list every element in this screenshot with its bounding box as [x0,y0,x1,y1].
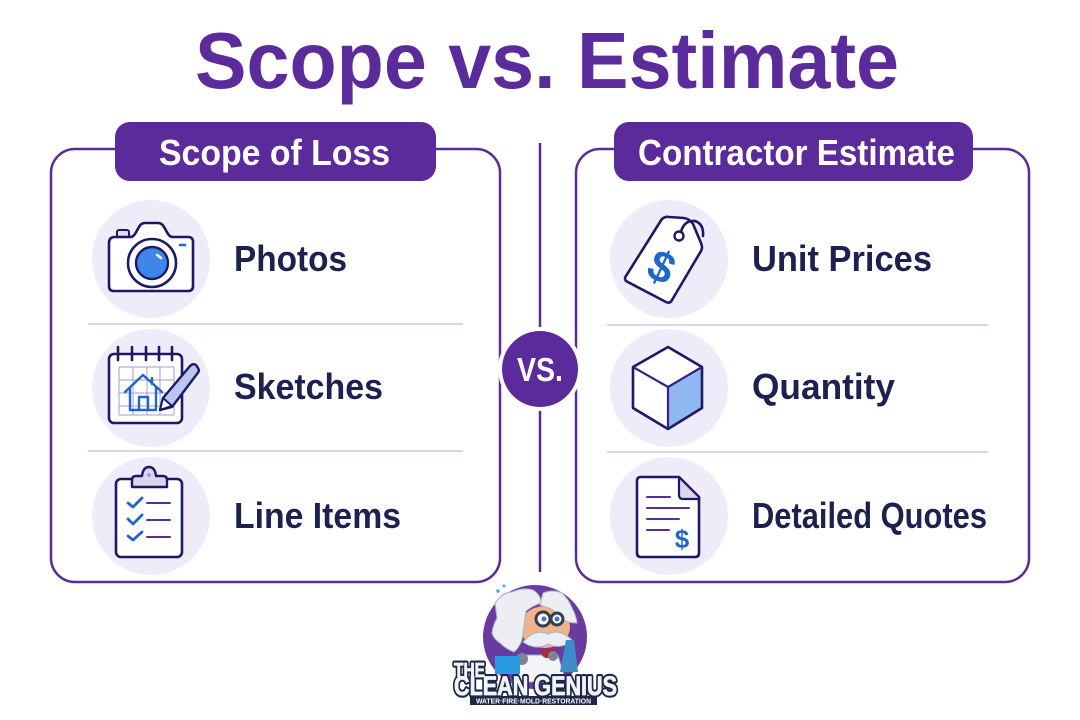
panel: scope of loss [51,122,500,582]
logo wordmark: CLEAN GENIUS [454,671,617,701]
vs badge: VS. [517,351,563,388]
icon: sketch pad [92,329,210,447]
label: detailed quotes: Detailed Quotes [752,495,987,536]
icon: quote document [610,457,728,575]
label: unit prices: Unit Prices [752,238,932,279]
logo: the clean genius [454,584,617,706]
logo tagline: WATER·FIRE·MOLD·RESTORATION [476,698,591,706]
logo tagline [470,696,597,706]
label: sketches: Sketches [234,366,383,407]
icon: price tag [610,200,728,318]
logo wordmark: CLEAN GENIUS [454,671,617,701]
heading: scope of loss [115,122,436,181]
title: Scope vs. Estimate [195,16,899,105]
mascot badge [483,584,587,689]
vs badge [498,327,582,411]
icon: camera [92,200,210,318]
center divider line [539,143,541,572]
label: quantity: Quantity [752,366,895,407]
heading: scope of loss: Scope of Loss [159,132,390,173]
logo wordmark: THE [454,660,485,682]
panel: contractor estimate [576,122,1029,582]
icon: price tag: $ [640,240,683,295]
logo wordmark [454,660,617,701]
icon: clipboard [92,457,210,575]
icon: cube [610,329,728,447]
label: photos: Photos [234,238,347,279]
heading: contractor estimate: Contractor Estimate [638,132,955,173]
icon: quote document: $ [675,524,690,554]
logo wordmark: THE [454,660,485,682]
heading: contractor estimate [614,122,973,181]
label: line items: Line Items [234,495,401,536]
